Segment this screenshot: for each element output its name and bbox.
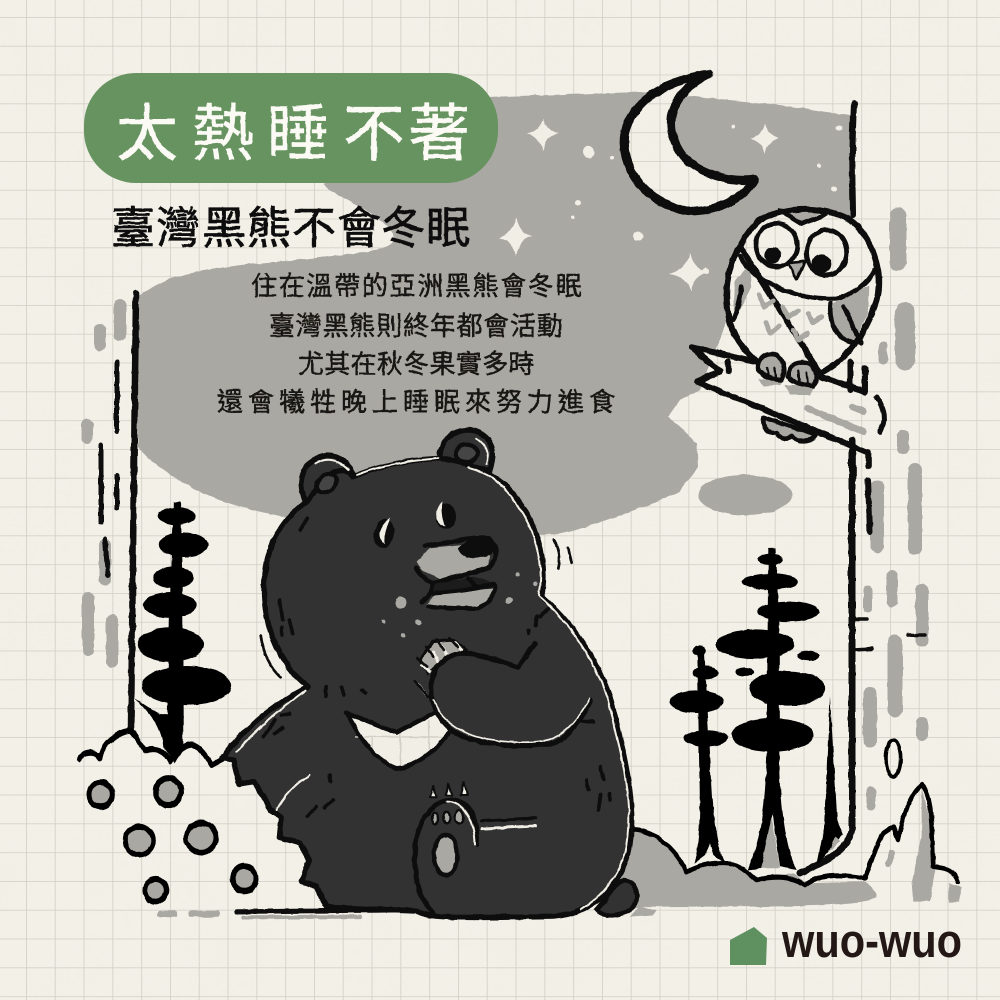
- foot pad and toes: [434, 835, 457, 875]
- chest crescent: [346, 713, 451, 767]
- left pine: [134, 502, 232, 763]
- ground shadow: [630, 907, 657, 917]
- left pine and berries: [79, 502, 256, 914]
- body text: 臺灣黑熊則終年都會活動: [269, 311, 564, 341]
- mouth: [430, 577, 497, 597]
- freckles: [381, 572, 537, 638]
- owl on branch: [692, 209, 879, 480]
- owl talons: [758, 354, 784, 380]
- forearm: [431, 644, 591, 746]
- owl body outline: [727, 209, 879, 373]
- owl eyes: [756, 223, 847, 275]
- foot claws: [430, 782, 467, 797]
- icon: green house: [730, 927, 767, 965]
- berries: [89, 778, 256, 902]
- ground line: [243, 911, 360, 923]
- black dashes and trunk marks: [101, 103, 925, 873]
- title: 太熱睡不著: [116, 100, 470, 169]
- motion lines: [261, 540, 572, 677]
- mountain gray fills: [912, 788, 935, 902]
- owl face and wings lines: [733, 211, 875, 343]
- body text: 尤其在秋冬果實多時: [298, 349, 535, 379]
- ground and right trees: [620, 548, 962, 917]
- illustration artwork: [79, 74, 962, 918]
- gray ground: [620, 830, 876, 910]
- muzzle: [417, 545, 490, 579]
- subtitle: 臺灣黑熊不會冬眠: [111, 204, 470, 253]
- paw fingers: [420, 640, 467, 673]
- black bear: [223, 430, 637, 918]
- owl beak: [788, 261, 805, 280]
- left ear: [301, 455, 355, 513]
- center pine trunk gray base: [761, 817, 780, 868]
- nose: [458, 538, 496, 558]
- body text: 住在溫帶的亞洲黑熊會冬眠: [251, 271, 583, 301]
- crescent moon: [624, 74, 755, 212]
- left hill outline: [79, 730, 227, 765]
- talon fingers: [767, 368, 808, 383]
- right ear: [440, 430, 493, 470]
- left pine: [669, 645, 728, 863]
- leg highlight: [482, 818, 535, 821]
- brand name: wuo-wuo: [781, 914, 962, 967]
- ground dashes: [161, 906, 217, 922]
- ear inner shapes: [313, 445, 478, 496]
- stars and dots: [499, 118, 842, 291]
- center pine: [716, 548, 826, 870]
- gray night sky blob: [137, 92, 853, 535]
- gray dashes right of tree trunk: [87, 216, 922, 864]
- rim highlights: [237, 438, 629, 909]
- small oval: [886, 740, 901, 777]
- body text: 還會犧牲晚上睡眠來努力進食: [217, 387, 620, 417]
- thin pine spike: [817, 697, 843, 865]
- gray dashes under branch: [807, 407, 863, 432]
- branch: [692, 347, 868, 480]
- body text: [217, 271, 620, 417]
- bear body: [223, 458, 632, 918]
- hill outlines: [635, 785, 958, 885]
- eyes: [372, 504, 456, 550]
- fur marks: [263, 518, 610, 817]
- logo: [730, 914, 962, 967]
- hanging talons: [763, 417, 816, 441]
- owl gray wing and forehead fills: [733, 211, 869, 395]
- raised foot: [415, 800, 477, 913]
- rear foot: [597, 881, 637, 915]
- green title pill: [84, 73, 498, 183]
- owl chest feathers: [759, 295, 822, 340]
